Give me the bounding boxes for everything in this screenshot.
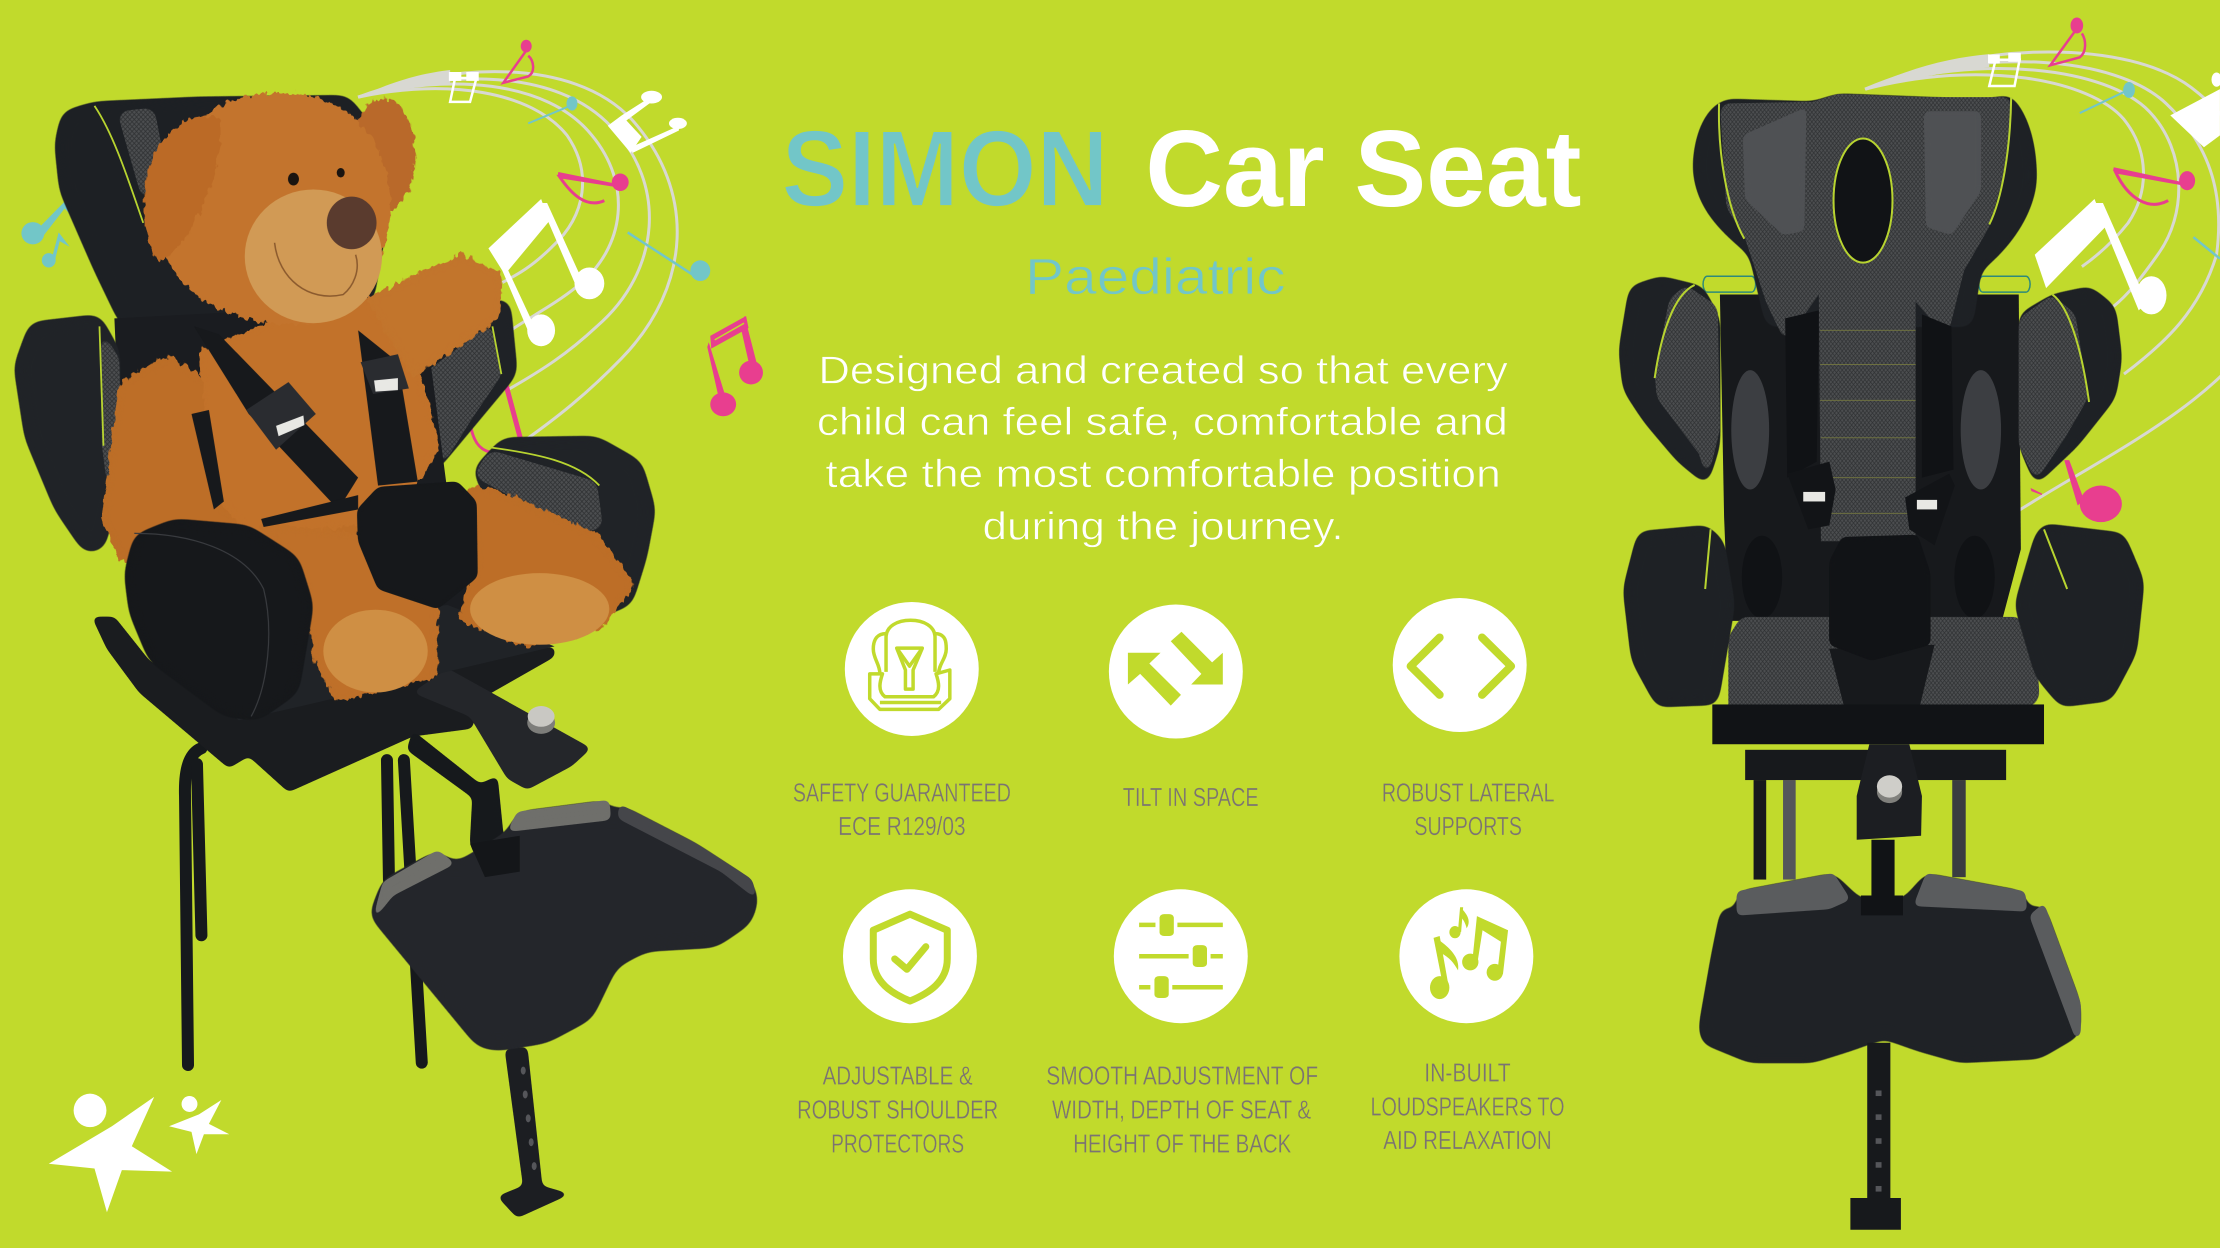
note: teal top: [2080, 82, 2135, 113]
icon: tilt arrows: [1128, 632, 1223, 706]
foot post: [1850, 1043, 1901, 1230]
head mesh: [1720, 94, 2012, 342]
foot plate: [369, 800, 758, 1051]
crotch pad: [357, 482, 477, 609]
note: pink flag top: [2050, 18, 2085, 65]
label: ROBUST LATERAL: [1382, 777, 1555, 807]
label: SMOOTH ADJUSTMENT OF: [1046, 1061, 1318, 1091]
description: take the most comfortable position: [825, 453, 1501, 496]
description: Designed and created so that every: [818, 349, 1508, 392]
front side bolster: [124, 519, 313, 720]
centre back panel: [1819, 295, 1916, 541]
teddy left leg: [254, 521, 438, 702]
harness straps: [191, 326, 418, 527]
lime piping seat: [1705, 529, 2067, 589]
feature: shoulder protectors: [797, 889, 998, 1158]
label: HEIGHT OF THE BACK: [1073, 1128, 1292, 1158]
right music staves and notes: [1865, 18, 2220, 522]
label: [797, 1061, 998, 1158]
seat cushion: [1728, 617, 2040, 720]
note: teal right: [2193, 237, 2220, 259]
label: SUPPORTS: [1414, 811, 1522, 841]
teddy ear right: [351, 98, 415, 213]
right wing mesh: [423, 322, 502, 470]
silver knob: [527, 706, 555, 734]
teddy muzzle: [245, 189, 382, 323]
seat headrest: [55, 96, 398, 342]
back black silhouette: [1720, 295, 2021, 621]
label: LOUDSPEAKERS TO: [1371, 1092, 1564, 1122]
frame bar: [1745, 750, 2006, 780]
note: hollow beamed: [450, 73, 477, 102]
feature: in-built loudspeakers: [1371, 889, 1564, 1155]
label: [1046, 1061, 1318, 1158]
label: [793, 777, 1011, 841]
buckles: [1787, 462, 1955, 545]
icon: music notes: [1430, 907, 1508, 999]
left car seat with teddy: [14, 92, 758, 1218]
label: IN-BUILT: [1424, 1057, 1511, 1087]
note: pink right: [707, 316, 763, 416]
crotch pad: [1829, 535, 1930, 661]
headrest mesh: [117, 107, 164, 207]
support arm: [407, 731, 520, 877]
feature: smooth adjustment: [1046, 889, 1318, 1158]
note: big white: [2035, 199, 2166, 314]
teal harness loops: [1703, 276, 2030, 292]
buckles: [246, 354, 409, 450]
label: AID RELAXATION: [1383, 1125, 1552, 1155]
icon: car seat: [870, 620, 950, 709]
feature: safety guaranteed: [793, 602, 1011, 841]
label: SAFETY GUARANTEED: [793, 777, 1011, 807]
note: white beamed top right: [608, 91, 687, 153]
description: during the journey.: [983, 505, 1344, 548]
label: WIDTH, DEPTH OF SEAT &: [1052, 1095, 1311, 1125]
foot post upper: [1861, 840, 1903, 915]
left music staves and notes: [21, 40, 763, 452]
note: white top right: [2170, 72, 2220, 147]
post holes: [521, 1067, 537, 1170]
description: child can feel safe, comfortable and: [817, 401, 1508, 444]
description: [817, 349, 1508, 548]
seat shoulder wing: [14, 314, 122, 553]
seat base: [1712, 704, 2044, 744]
crotch strap area: [1829, 645, 1935, 715]
panel stitching: [1820, 330, 1916, 513]
feature: robust lateral supports: [1382, 598, 1555, 841]
icon: chevrons: [1411, 637, 1511, 695]
head pads: [1743, 107, 1981, 235]
left seat bolster: [1623, 525, 1735, 707]
teddy bear: [102, 92, 636, 702]
feature: tilt in space: [1109, 605, 1259, 812]
legs: [1754, 780, 1966, 880]
shoulder straps: [1785, 310, 1954, 478]
note: pink middle: [2113, 169, 2195, 204]
note: pink flag top: [503, 40, 533, 83]
teddy foot pads: [323, 573, 609, 693]
teddy eyes: [288, 168, 345, 185]
logo: children stars: [49, 1094, 229, 1212]
right shoulder wing: [2019, 287, 2122, 486]
silver knob: [1877, 775, 1902, 803]
bolster stitching: [134, 533, 269, 716]
clamp: [470, 836, 520, 877]
note: big white beamed: [488, 199, 604, 346]
icon: shield: [873, 914, 947, 1001]
head bolster: [1693, 94, 2037, 326]
subtitle: Paediatric: [1025, 248, 1286, 305]
foot plate: [1699, 873, 2081, 1063]
seat back centre: [114, 302, 497, 637]
lime piping wings: [1655, 285, 2089, 402]
lime piping head: [1719, 97, 2011, 239]
note: hollow beamed: [1989, 54, 2020, 86]
seat frame legs: [185, 748, 422, 1065]
note: teal right: [628, 232, 710, 281]
foot plate post: [497, 1047, 570, 1218]
label: TILT IN SPACE: [1123, 782, 1259, 812]
wing mesh: [99, 326, 122, 486]
note: teal left: [21, 199, 75, 267]
bolster mesh: [473, 450, 603, 532]
label: PROTECTORS: [831, 1128, 964, 1158]
label: [1382, 777, 1555, 841]
left wing mesh: [1655, 285, 1720, 482]
note: pink bottom: [2031, 460, 2122, 522]
teddy right arm: [366, 253, 502, 378]
teddy torso: [199, 298, 440, 537]
label: ADJUSTABLE &: [823, 1061, 973, 1091]
label: [1371, 1057, 1564, 1155]
teddy head: [157, 92, 390, 325]
left shoulder wing: [1619, 276, 1720, 486]
icon: sliders: [1139, 914, 1223, 998]
lime piping: [95, 106, 599, 486]
lower harness mounds: [1742, 536, 1995, 618]
title: SIMON: [782, 108, 1109, 230]
title second part: Car Seat: [1145, 108, 1581, 230]
foot plate grey edges: [372, 800, 757, 922]
teddy ear left: [144, 117, 220, 263]
note: pink middle: [558, 174, 629, 203]
note: pink behind seat: [470, 386, 521, 452]
label: ROBUST SHOULDER: [797, 1095, 998, 1125]
side pads: [1731, 370, 2001, 490]
post holes: [1876, 1090, 1882, 1192]
tilt handle: [1857, 744, 1922, 840]
tilt handle: [413, 669, 591, 790]
right car seat front view: [1619, 94, 2144, 1230]
foot plate grey edges: [1737, 873, 2081, 1039]
teddy left arm and side: [102, 354, 358, 561]
right wing mesh: [2019, 295, 2088, 482]
head opening: [1834, 139, 1892, 263]
teddy nose: [327, 197, 377, 249]
seat back right wing: [373, 298, 517, 478]
right seat bolster: [2015, 524, 2144, 707]
teddy smile: [275, 243, 357, 296]
teddy right leg: [458, 486, 636, 646]
under frame: [92, 617, 555, 792]
note: teal top: [528, 96, 577, 123]
seat bolster right: [473, 436, 656, 637]
label: ECE R129/03: [838, 811, 966, 841]
seat cushion: [149, 605, 555, 720]
